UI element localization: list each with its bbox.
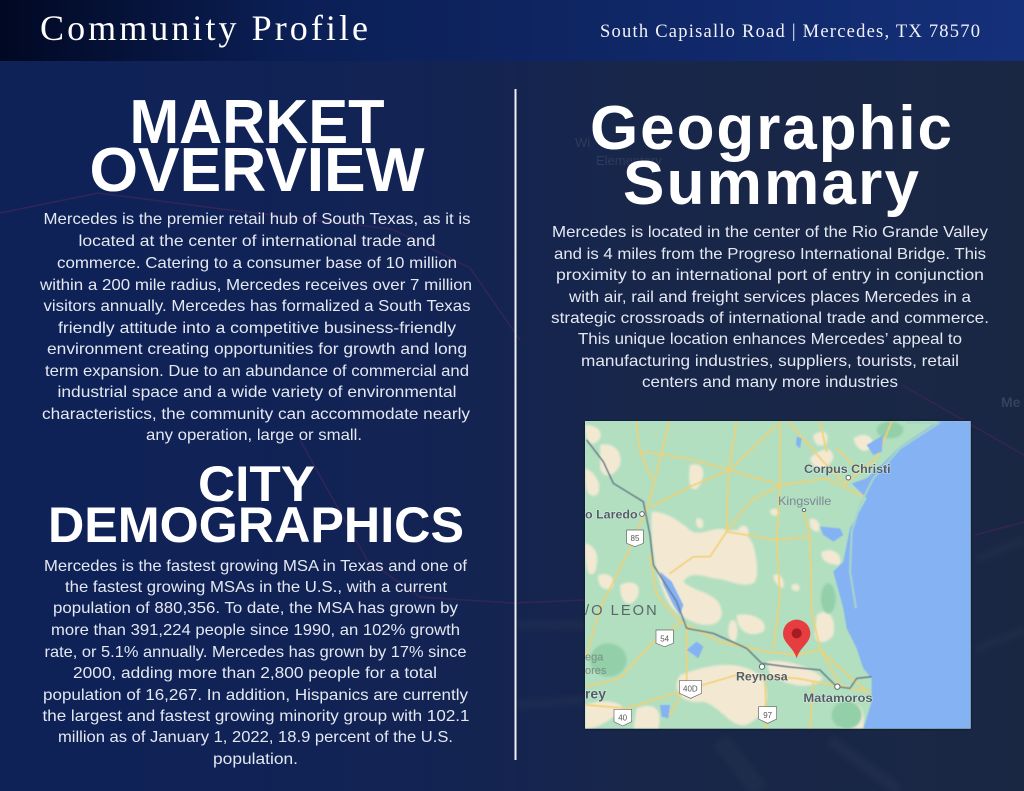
text: city demographics: the fastest growing MSAs in the U.S., with a current [65,579,448,596]
text: geographic summary: and is 4 miles from the Progreso International Bridge. This [554,246,986,263]
text: market overview: any operation, large or small. [146,427,362,444]
map highway shields: 40 [618,714,628,723]
text: city demographics: the largest and fastest growing minority group with 102.1 [42,708,470,725]
text: market overview: within a 200 mile radius, Mercedes receives over 7 million [39,277,472,294]
heading: market overview [90,88,425,205]
heading: city demographics: DEMOGRAPHICS [48,497,464,553]
map labels [585,462,891,705]
header address: South Capisallo Road | Mercedes, TX 78570 [600,22,980,42]
map labels: Matamoros [803,691,873,705]
text: city demographics: million as of January 1, 2022, 18.9 percent of the U.S. [58,729,453,746]
map pin [783,620,810,658]
heading: geographic summary [590,94,952,218]
background: aerial photo under navy overlay: Elementary [596,153,662,168]
map land: cream areas [585,425,873,729]
text: market overview: industrial space and a wide variety of environmental [58,384,456,401]
text: city demographics: population. [213,751,298,768]
heading: geographic summary: Geographic [590,94,952,163]
map highway shields [614,530,777,726]
text: market overview [39,211,472,444]
text: market overview: friendly attitude into a competitive business-friendly [58,320,456,337]
text: geographic summary: strategic crossroads of international trade and commerce. [551,310,989,327]
text: geographic summary: manufacturing industries, suppliers, tourists, retail [581,353,959,370]
map labels: Reynosa [736,669,788,683]
map highway shields: 54 [660,635,670,644]
map labels: /O LEON [585,603,657,619]
text: city demographics: more than 391,224 people since 1990, an 102% growth [51,622,460,639]
text: geographic summary: with air, rail and freight services places Mercedes in a [568,289,971,306]
text: geographic summary: Mercedes is located in the center of the Rio Grande Valley [552,224,988,241]
text: market overview: term expansion. Due to an abundance of commercial and [45,363,469,380]
text: geographic summary: proximity to an international port of entry in conjunction [556,267,984,284]
map labels: o Laredo [585,509,638,522]
header bar [0,0,1024,61]
text: city demographics: Mercedes is the fastest growing MSA in Texas and one of [44,558,468,575]
map labels: ega [585,652,604,664]
text: market overview: commerce. Catering to a consumer base of 10 million [57,255,457,272]
background: aerial photo under navy overlay: Wi [575,135,590,150]
heading: city demographics: CITY [198,456,315,512]
heading: market overview: MARKET [130,88,385,157]
background: aerial photo under navy overlay: Me [1001,394,1021,410]
header title: Community Profile [40,8,368,48]
text: city demographics: rate, or 5.1% annually. Mercedes has grown by 17% since [44,644,467,661]
heading: geographic summary: Summary [623,149,920,218]
heading: market overview: OVERVIEW [90,136,425,205]
map labels: Corpus Christi [804,462,891,476]
text: city demographics [42,558,470,768]
map border: Rio Grande [587,440,872,688]
map labels: Kingsville [778,495,831,508]
text: geographic summary: This unique location enhances Mercedes’ appeal to [578,331,962,348]
text: city demographics: population of 16,267. In addition, Hispanics are currently [43,687,468,704]
map land: darker green [590,422,903,729]
map roads [587,422,892,728]
map water: gulf [833,421,971,729]
map water: lakes [660,435,883,718]
map highway shields: 85 [631,534,640,543]
text: geographic summary: centers and many more industries [642,374,898,391]
text: city demographics: 2000, adding more than 2,800 people for a total [73,665,437,682]
map highway shields: 97 [763,711,773,720]
text: market overview: visitors annually. Mercedes has formalized a South Texas [44,298,470,315]
text: market overview: located at the center of international trade and [78,233,436,250]
text: market overview: Mercedes is the premier retail hub of South Texas, as it is [44,211,470,228]
text: market overview: environment creating opportunities for growth and long [47,341,467,358]
center divider [514,89,516,760]
text: geographic summary [551,224,989,391]
text: city demographics: population of 880,356. To date, the MSA has grown by [53,600,458,617]
text: market overview: characteristics, the community can accommodate nearly [42,406,470,423]
heading: city demographics [48,456,464,553]
map of South Texas [585,421,971,729]
map labels: ores [585,665,607,677]
map highway shields: 40D [683,685,698,694]
map labels: rey [585,686,606,702]
